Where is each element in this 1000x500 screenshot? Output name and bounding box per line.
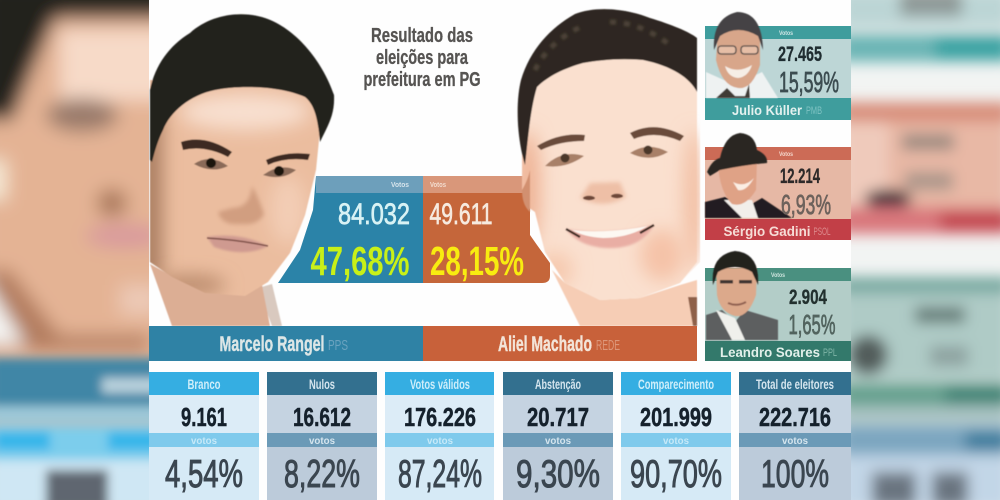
- photo: Marcelo Rangel: [136, 14, 334, 326]
- percentage: 15,59%: [779, 67, 839, 99]
- percentage: 90,70%: [630, 453, 722, 496]
- photo: Aliel Machado: [516, 9, 704, 326]
- candidate name: Marcelo Rangel: [220, 333, 324, 356]
- caption: votos: [545, 436, 571, 447]
- caption: Votos: [771, 272, 785, 279]
- panel: Leandro Soares: [705, 251, 851, 361]
- label: Abstenção: [535, 376, 581, 392]
- name: Julio Küller: [732, 102, 803, 118]
- percentage: 9,30%: [516, 453, 600, 496]
- percentage: 28,15%: [430, 238, 524, 284]
- label: Branco: [188, 376, 220, 392]
- candidate name: Aliel Machado: [498, 333, 592, 356]
- party: PSOL: [814, 226, 830, 238]
- eyebrows and eyes: [181, 140, 232, 157]
- caption: Votos: [779, 30, 793, 37]
- votes: 201.999: [640, 402, 712, 432]
- stat card: Branco: [149, 372, 259, 500]
- caption: Votos: [779, 151, 793, 158]
- panel: blurred right background: [840, 0, 1000, 500]
- panel: Julio Küller: [705, 12, 851, 120]
- caption: votos: [427, 436, 453, 447]
- mouth: [207, 236, 268, 252]
- party: PPS: [328, 337, 348, 354]
- votes caption: Votos: [391, 182, 409, 189]
- caption: votos: [663, 436, 689, 447]
- caption: votos: [782, 436, 808, 447]
- eyebrows and eyes: [537, 134, 585, 150]
- percentage: 6,93%: [781, 189, 831, 220]
- votes: 20.717: [527, 402, 589, 432]
- stat card: Total de eleitores: [739, 372, 851, 500]
- votes number: 49.611: [430, 198, 492, 231]
- title: [364, 25, 480, 91]
- panel: blurred left background: [0, 0, 170, 500]
- hair: [150, 14, 334, 162]
- panel: blue vote box for Marcelo Rangel: [278, 176, 423, 284]
- percentage: 47,68%: [310, 238, 410, 284]
- portrait: Sérgio Gadini: [705, 133, 792, 218]
- hair: [518, 9, 697, 165]
- label: Total de eleitores: [756, 376, 834, 392]
- nose: [218, 186, 264, 224]
- votes: 16.612: [293, 402, 351, 432]
- party: PMB: [806, 105, 822, 117]
- title: eleições para: [376, 47, 469, 69]
- label: Nulos: [309, 376, 335, 392]
- portrait: Leandro Soares: [706, 251, 778, 340]
- stat card: Comparecimento: [621, 372, 731, 500]
- nose: [580, 182, 626, 204]
- caption: votos: [191, 436, 217, 447]
- label: Votos válidos: [410, 376, 470, 392]
- votes: 12.214: [780, 165, 820, 188]
- party: REDE: [596, 337, 620, 354]
- name: Sérgio Gadini: [724, 223, 810, 239]
- votes caption: Votos: [430, 182, 446, 189]
- percentage: 8,22%: [284, 453, 360, 496]
- name bar: Marcelo Rangel: [149, 326, 423, 361]
- votes: 2.904: [789, 286, 827, 309]
- stat card: Votos válidos: [385, 372, 494, 500]
- votes number: 84.032: [338, 198, 410, 231]
- percentage: 87,24%: [398, 453, 482, 496]
- percentage: 100%: [761, 453, 829, 496]
- panel: orange vote box for Aliel Machado: [423, 176, 550, 284]
- stat card: Nulos: [267, 372, 377, 500]
- votes: 222.716: [759, 402, 831, 432]
- panel: Sérgio Gadini: [705, 133, 851, 240]
- portrait: Julio Küller: [706, 12, 778, 98]
- smile: [566, 225, 654, 248]
- title: Resultado das: [371, 25, 473, 47]
- label: Comparecimento: [638, 376, 714, 392]
- votes: 176.226: [404, 402, 476, 432]
- percentage: 4,54%: [165, 453, 243, 496]
- title: prefeitura em PG: [364, 69, 480, 91]
- percentage: 1,65%: [788, 309, 836, 340]
- party: PPL: [823, 347, 837, 359]
- stat card: Abstenção: [503, 372, 613, 500]
- caption: votos: [309, 436, 335, 447]
- votes: 27.465: [778, 43, 822, 66]
- panel: central white page: [149, 0, 851, 500]
- name bar: Aliel Machado: [423, 326, 697, 361]
- votes: 9.161: [181, 402, 227, 432]
- name: Leandro Soares: [720, 344, 820, 360]
